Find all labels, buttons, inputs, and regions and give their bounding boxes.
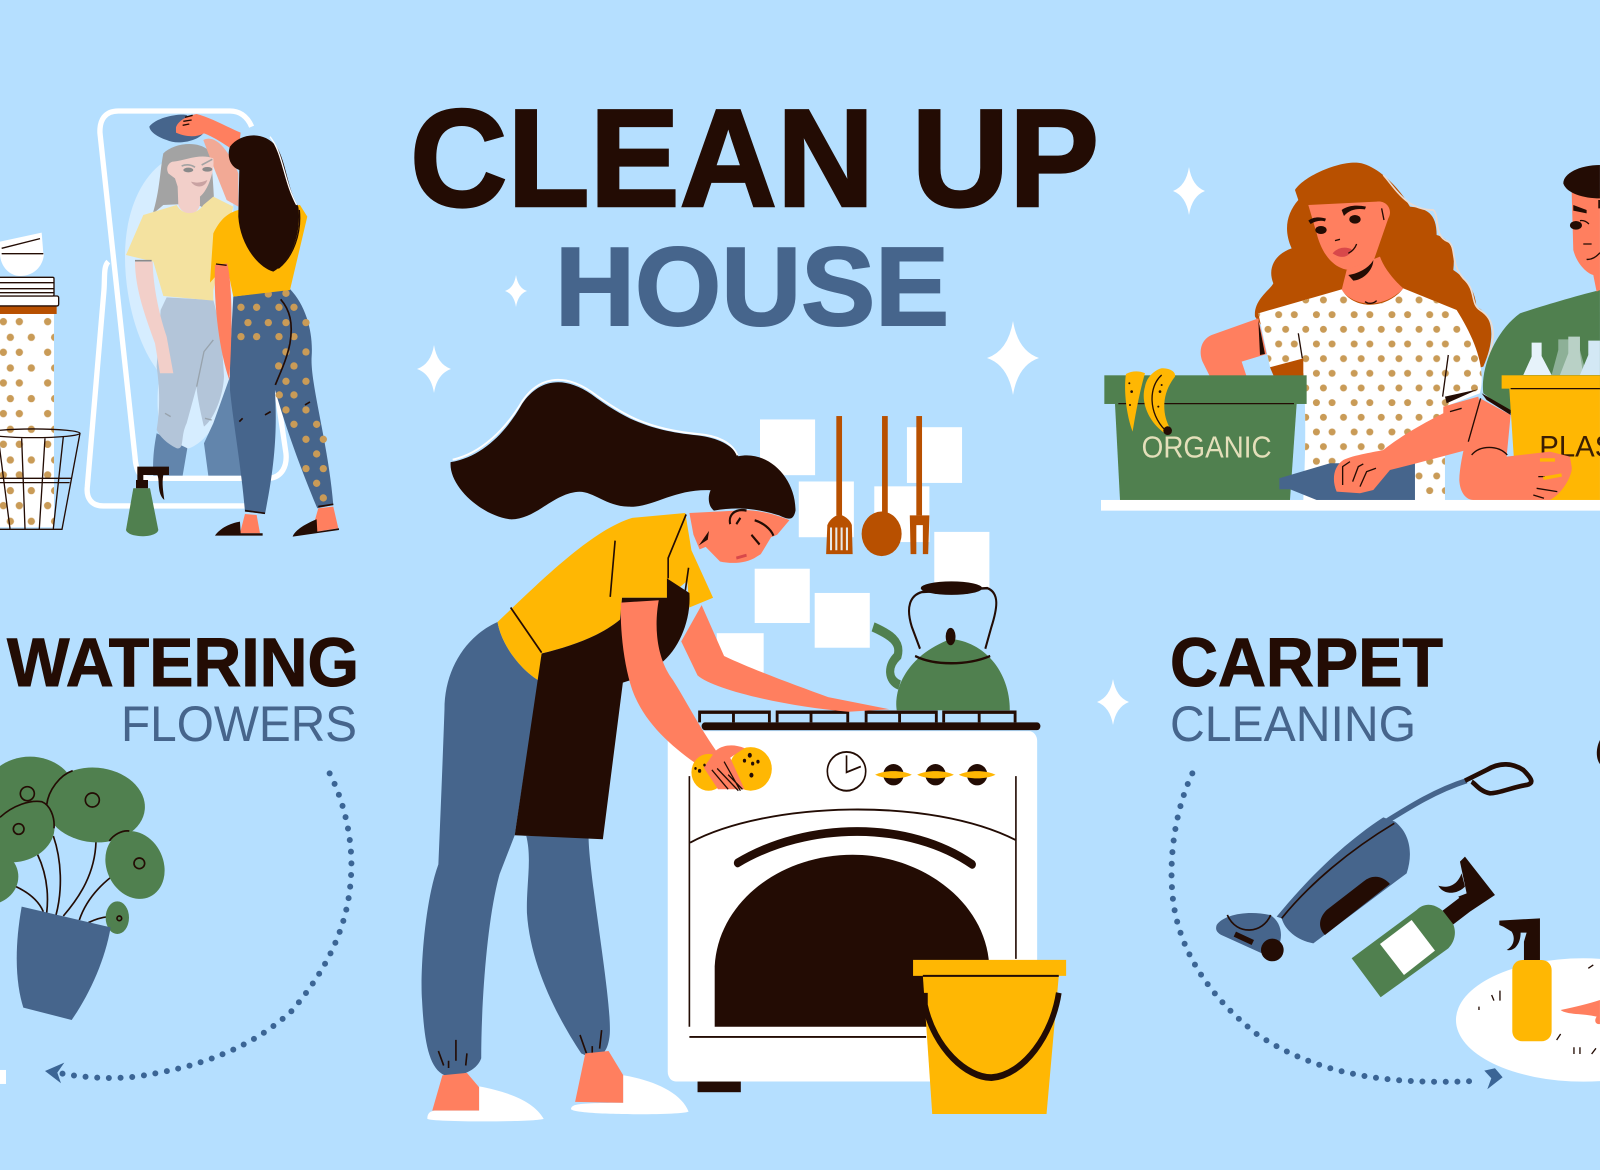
plastic bin with bottles: [1459, 337, 1600, 500]
plant leaves and stems: [0, 757, 175, 934]
reflection of woman: [126, 139, 242, 476]
woman with red hair: [1201, 163, 1493, 500]
title: clean up: CLEAN UP: [410, 81, 1099, 236]
sparkles: [417, 167, 1205, 725]
burner grates: [700, 712, 1015, 722]
white tile fragment: [0, 1070, 6, 1084]
oven: [668, 722, 1040, 1092]
head with flowing hair: [451, 380, 796, 563]
illustration: carpet cleaning: [1172, 740, 1600, 1089]
heading: watering flowers: [7, 624, 359, 752]
flower pot: [17, 907, 111, 1020]
heading: watering flowers: FLOWERS: [121, 696, 357, 752]
dotted arrow: [1172, 773, 1503, 1089]
spray bottle: [126, 467, 169, 536]
sponge and hand: [691, 745, 772, 791]
woman seen from behind: [149, 114, 339, 537]
heading: carpet cleaning: [1170, 624, 1443, 752]
kettle: [873, 581, 1010, 710]
organic bin: [1104, 368, 1307, 500]
yellow bucket: [913, 960, 1066, 1114]
white counter: [1101, 500, 1600, 511]
illustration: woman at mirror: [0, 111, 339, 537]
far arm: [681, 605, 889, 712]
heading: watering flowers: WATERING: [7, 624, 359, 701]
cuff creases: [438, 1030, 602, 1068]
partial dark shape at edge: [1597, 740, 1600, 764]
hanging utensils: [826, 416, 929, 556]
shirt creases: [511, 514, 689, 653]
feet and slippers: [427, 1051, 689, 1121]
stacked column with plates and basket: [0, 233, 80, 529]
apron: [515, 578, 690, 839]
blue bottle and woman's arm: [1279, 389, 1479, 500]
dotted arrow: [45, 773, 351, 1083]
mirror frame: [87, 111, 286, 506]
illustration: woman cleaning the oven: [422, 380, 1066, 1121]
trousers: [422, 622, 610, 1076]
white rug: [1456, 958, 1600, 1082]
banana peels: [1125, 368, 1175, 435]
wall tiles: [717, 419, 989, 682]
near arm: [621, 600, 742, 787]
illustration: recycling couple: [1101, 163, 1600, 511]
yellow shirt: [498, 513, 713, 680]
green spray bottle: [1352, 857, 1495, 997]
subtitle: house: HOUSE: [555, 225, 949, 349]
mirror glare: [125, 158, 233, 450]
yellow spray bottle: [1499, 918, 1552, 1041]
vacuum cleaner: [1216, 764, 1531, 961]
illustration: potted plant with dotted arrow: [0, 757, 351, 1084]
organic bin: ORGANIC: [1142, 430, 1272, 464]
man: [1483, 165, 1600, 413]
heading: carpet cleaning: CLEANING: [1170, 696, 1416, 752]
heading: carpet cleaning: CARPET: [1170, 624, 1443, 701]
